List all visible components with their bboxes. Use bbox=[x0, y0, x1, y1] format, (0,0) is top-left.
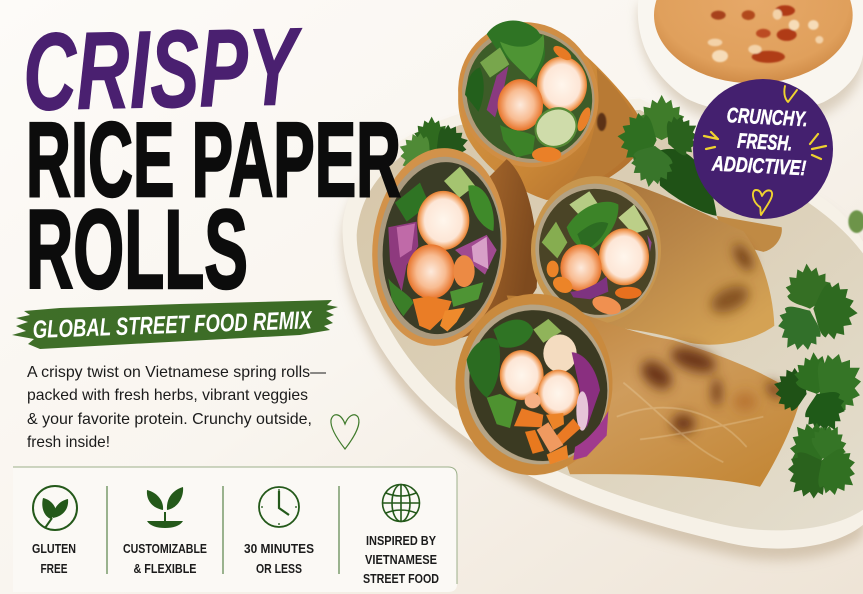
description text: fresh inside! bbox=[27, 434, 110, 451]
feature: customizable bbox=[123, 487, 207, 576]
feature: inspired by vietnamese street food: STREET FOOD bbox=[363, 571, 439, 586]
badge line 1: CRUNCHY. bbox=[726, 104, 808, 131]
description text bbox=[27, 364, 326, 451]
description text: packed with fresh herbs, vibrant veggies bbox=[27, 387, 308, 404]
feature: gluten free bbox=[32, 486, 77, 576]
dipping sauce bowl bbox=[638, 0, 863, 126]
title: rice paper: RICE PAPER bbox=[26, 101, 401, 219]
plate shadow bbox=[343, 110, 863, 560]
title: rolls: ROLLS bbox=[26, 187, 248, 312]
badge yellow accents bbox=[704, 86, 826, 215]
description text: A crispy twist on Vietnamese spring rolls— bbox=[27, 364, 326, 381]
feature: gluten free: FREE bbox=[40, 561, 68, 576]
subtitle banner bbox=[12, 300, 338, 349]
feature: inspired by vietnamese street food: INSPIRED BY bbox=[366, 533, 436, 548]
roll: bottom bbox=[433, 269, 801, 500]
badge line 2: FRESH. bbox=[737, 130, 793, 156]
feature: 30 minutes: 30 MINUTES bbox=[244, 541, 314, 556]
description text: & your favorite protein. Crunchy outside, bbox=[27, 411, 312, 428]
roll end behind bbox=[717, 216, 782, 252]
herbs behind left roll bbox=[394, 117, 472, 179]
feature: 30 minutes bbox=[244, 487, 314, 576]
icon: hand-drawn heart bbox=[331, 415, 359, 449]
features panel bbox=[13, 467, 457, 592]
badge: crunchy fresh addictive bbox=[693, 79, 833, 219]
subtitle banner: GLOBAL STREET FOOD REMIX bbox=[32, 306, 313, 344]
feature: customizable: & FLEXIBLE bbox=[134, 561, 197, 576]
herb sprig: right upper bbox=[769, 261, 860, 362]
title: crispy: CRISPY bbox=[22, 5, 304, 134]
feature: 30 minutes: OR LESS bbox=[256, 561, 302, 576]
feature: inspired by vietnamese street food bbox=[363, 484, 439, 586]
food photo illustration bbox=[343, 0, 863, 560]
roll: top bbox=[444, 4, 643, 200]
herb sprig: right middle bbox=[769, 342, 863, 442]
herb sprig: centre bbox=[616, 95, 717, 216]
feature: customizable: CUSTOMIZABLE bbox=[123, 541, 207, 556]
serving plate bbox=[343, 98, 863, 549]
feature: inspired by vietnamese street food: VIETNAMESE bbox=[365, 552, 437, 567]
roll: right bbox=[507, 149, 774, 351]
feature: gluten free: GLUTEN bbox=[32, 541, 76, 556]
far herb blur bbox=[848, 210, 863, 233]
herb sprig: right lower bbox=[778, 411, 863, 510]
badge line 3: ADDICTIVE! bbox=[711, 152, 807, 180]
roll: left bbox=[361, 138, 537, 356]
